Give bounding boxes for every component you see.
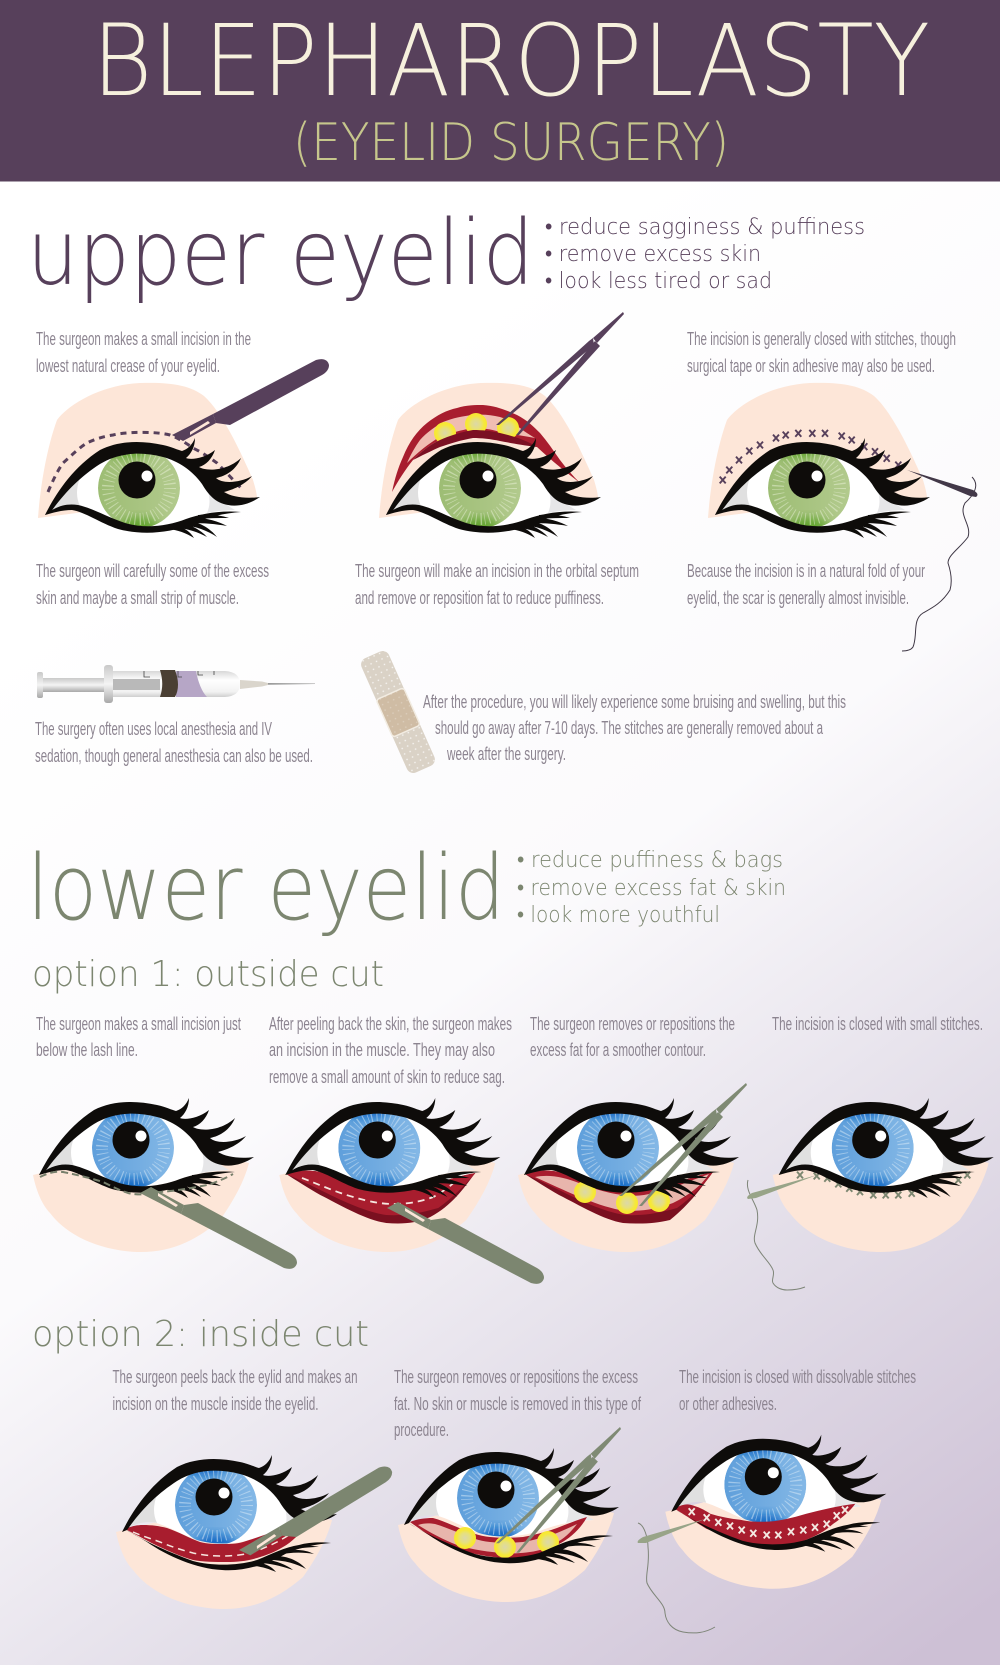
step 3 text (355, 561, 639, 608)
illustration: green eye with scalpel (38, 359, 329, 538)
benefit list: lower eyelid: • remove excess fat & skin (517, 876, 786, 901)
option 2 step 1 text: The surgeon peels back the eylid and makes an (112, 1367, 358, 1387)
step 3 text: The surgeon will make an incision in the orbital septum (355, 561, 639, 581)
option 1 step 1 text: The surgeon makes a small incision just (36, 1014, 241, 1034)
subtitle: (EYELID SURGERY) (293, 113, 729, 173)
icon: needle and thread (638, 1519, 715, 1633)
option 2 step 2 text (394, 1367, 642, 1440)
option 1 step 1 text: below the lash line. (36, 1040, 138, 1060)
benefit list: upper eyelid: • remove excess skin (545, 242, 761, 267)
step 2 text (36, 561, 269, 608)
step 2 text: The surgeon will carefully some of the excess (36, 561, 269, 581)
syringe text: sedation, though general anesthesia can also be used. (35, 746, 313, 766)
option 2 step 1 text (112, 1367, 358, 1414)
illustration: blue eye inner lid with dissolvable stitches (638, 1435, 886, 1633)
header banner (0, 0, 1000, 182)
option 1 step 1 text (36, 1014, 241, 1060)
illustration: blue eye with stitches and needle (747, 1098, 994, 1290)
step 1 text: lowest natural crease of your eyelid. (36, 356, 220, 376)
option 1 step 2 text: After peeling back the skin, the surgeon makes (269, 1014, 512, 1034)
syringe text: The surgery often uses local anesthesia and IV (35, 719, 272, 739)
option 1 step 3 text: The surgeon removes or repositions the (530, 1014, 735, 1034)
benefit list: lower eyelid: • reduce puffiness & bags (517, 848, 783, 873)
step 4 text (687, 329, 956, 376)
step 3 text: and remove or reposition fat to reduce puffiness. (355, 588, 604, 608)
step 1 text: The surgeon makes a small incision in the (36, 329, 251, 349)
illustration: blue eye inner lid with scalpel (116, 1455, 396, 1609)
option 2 step 3 text (679, 1367, 916, 1414)
panel: lower eyelid (27, 836, 994, 1633)
illustration: blue eye with fat removal and tweezers (518, 1083, 747, 1252)
icon: needle and thread (902, 470, 977, 651)
option 1 step 2 text: an incision in the muscle. They may also (269, 1040, 495, 1060)
benefit list: upper eyelid: • look less tired or sad (545, 269, 772, 294)
illustration: blue eye with dashed line and scalpel (33, 1098, 297, 1269)
benefit list: lower eyelid: • look more youthful (517, 903, 720, 928)
step 5 text (687, 561, 925, 608)
option 1 step 3 text (530, 1014, 735, 1060)
option 2 step 2 text: fat. No skin or muscle is removed in this type of (394, 1394, 642, 1414)
step 1 text (36, 329, 251, 376)
benefit list: upper eyelid (545, 215, 865, 294)
heading: option 2: option 2: inside cut (32, 1314, 369, 1355)
option 2 step 1 text: incision on the muscle inside the eyelid. (112, 1394, 318, 1414)
icon: bandage (359, 649, 437, 775)
heading: upper eyelid: upper eyelid (27, 201, 534, 306)
option 2 step 2 text: The surgeon removes or repositions the excess (394, 1367, 638, 1387)
recovery text (423, 692, 846, 764)
illustration: blue eye with open skin flap and scalpel (279, 1098, 544, 1284)
panel: upper eyelid (27, 201, 977, 775)
icon: syringe (37, 665, 315, 703)
option 2 step 2 text: procedure. (394, 1420, 449, 1440)
illustration: green eye with open incision and tweezers (379, 312, 624, 538)
title: BLEPHAROPLASTY (92, 4, 930, 119)
illustration: green eye with stitches and needle (708, 383, 977, 651)
syringe text (35, 719, 313, 766)
option 1 step 2 text (269, 1014, 512, 1087)
illustration: blue eye inner lid with fat and tweezers (398, 1427, 624, 1602)
option 1 step 2 text: remove a small amount of skin to reduce sag. (269, 1067, 505, 1087)
recovery text: week after the surgery. (446, 744, 566, 764)
step 2 text: skin and maybe a small strip of muscle. (36, 588, 239, 608)
heading: lower eyelid: lower eyelid (27, 836, 505, 941)
benefit list: lower eyelid (517, 848, 786, 928)
heading: option 1: option 1: outside cut (32, 954, 384, 995)
benefit list: upper eyelid: • reduce sagginess & puffiness (545, 215, 865, 240)
option 1 step 3 text: excess fat for a smoother contour. (530, 1040, 706, 1060)
icon: needle and thread (747, 1175, 817, 1290)
option 2 step 3 text: or other adhesives. (679, 1394, 777, 1414)
